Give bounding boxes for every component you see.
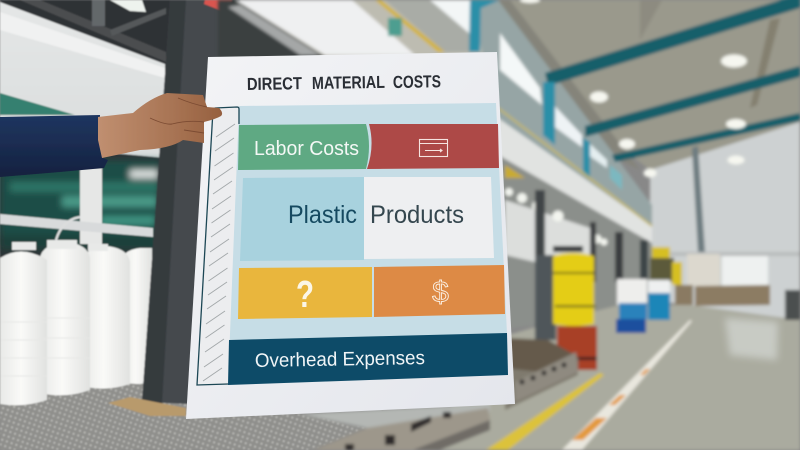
pallet machine [505, 338, 578, 410]
plastic products block [240, 177, 494, 261]
poster [186, 52, 515, 419]
balcony [498, 118, 652, 243]
upper wall [218, 0, 518, 60]
light blue panel [229, 103, 507, 340]
teal beams [545, 0, 800, 162]
wooden base [108, 397, 186, 416]
blue columns [469, 0, 590, 178]
ceiling [470, 0, 800, 170]
yellow floor line [486, 373, 604, 450]
floor reflection [725, 318, 778, 360]
floor plate [0, 380, 367, 450]
back machines and pallets [650, 247, 800, 320]
overhead expenses bar: Overhead Expenses [255, 347, 425, 372]
side strip [197, 107, 239, 385]
labor costs block: Labor Costs [254, 138, 359, 160]
white and blue drums [616, 279, 670, 333]
plastic products block: Plastic [288, 201, 357, 229]
ceiling beams and light [20, 0, 166, 62]
background: upper centre and right hall [218, 0, 800, 450]
orange dollar block [374, 265, 505, 317]
back wall [650, 122, 800, 320]
yellow and red drum [535, 190, 597, 370]
title [247, 71, 441, 94]
floor [420, 305, 800, 450]
poster sheet [186, 52, 515, 419]
dashed floor line [562, 320, 692, 450]
bottles [0, 217, 152, 405]
icon: dollar sign: $ [432, 276, 449, 309]
icon: folder [420, 140, 448, 156]
ceiling lights [520, 0, 747, 178]
title: DIRECT [247, 73, 302, 94]
hand [98, 93, 222, 158]
title: COSTS [393, 71, 441, 92]
white wall [0, 2, 165, 158]
white pole [80, 168, 102, 244]
plastic products block: Products [370, 201, 464, 229]
labor costs block [238, 124, 369, 170]
lower grey machine block [300, 404, 490, 450]
under balcony [498, 155, 652, 330]
glazing and skylight [470, 0, 652, 226]
railing [0, 214, 153, 237]
overhead expenses bar [228, 333, 508, 385]
sleeve [0, 115, 108, 177]
green racks [0, 160, 160, 250]
steel column [142, 0, 232, 404]
background: left side of factory [0, 0, 367, 450]
icon: question mark: ? [296, 274, 314, 316]
title: MATERIAL [312, 72, 385, 93]
arm holding the poster [0, 93, 222, 177]
red block with folder icon [367, 124, 499, 169]
yellow question block [238, 267, 372, 319]
